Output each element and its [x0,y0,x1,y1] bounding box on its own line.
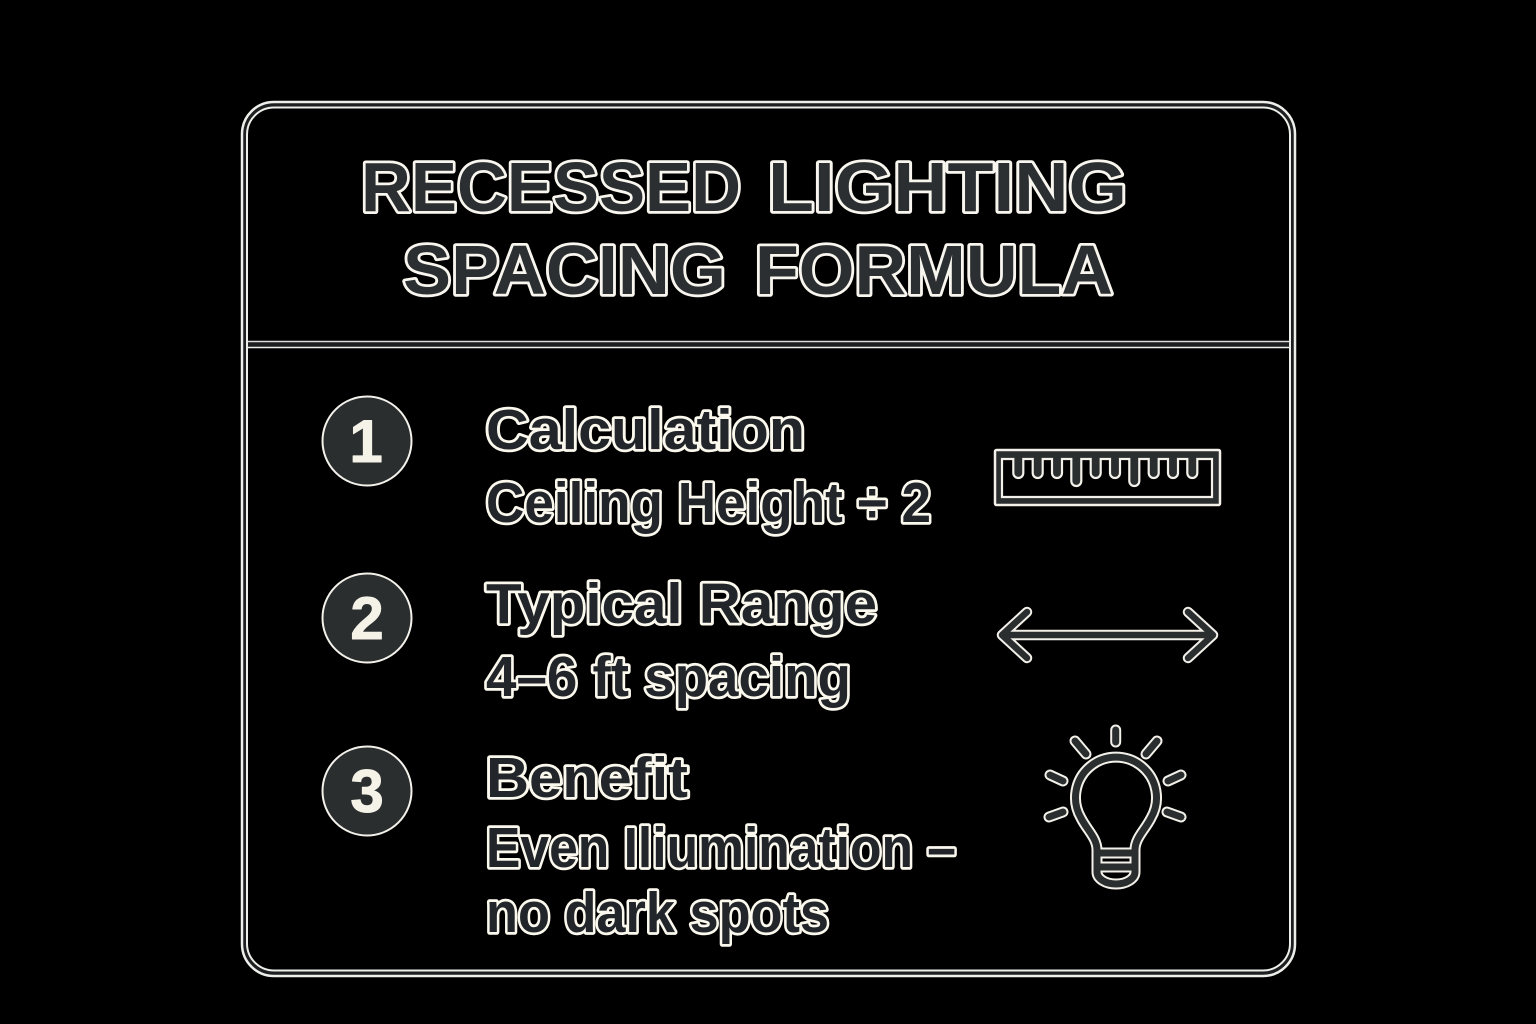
title: FORMULA [755,231,1113,309]
step 3 text: benefit: Benefit [486,746,688,810]
icon: ruler [995,450,1220,505]
icon: light bulb [1049,730,1181,884]
step 1 text: calculation [486,398,931,535]
step 3 number badge [322,746,412,836]
step 3 text: benefit: Even Iliumination – [486,816,956,880]
step 2 text: typical range: Typical Range [486,572,877,636]
step 1 text: calculation: Calculation [486,398,805,462]
step 2 number badge [322,574,412,662]
step 2 text: typical range: 4–6 ft spacing [486,645,851,709]
step 1 number badge [322,396,412,486]
title [361,148,1127,309]
icon: double arrow [1002,612,1213,658]
title: SPACING [403,231,726,309]
step 2 number badge: 2 [350,585,384,652]
step 2 text: typical range [486,572,877,709]
step 1 number badge: 1 [349,408,383,475]
panel: main frame [242,102,1295,976]
step 3 number badge: 3 [350,758,384,825]
step 3 text: benefit [486,746,956,945]
title: LIGHTING [768,148,1127,226]
step 1 text: calculation: Ceiling Height ÷ 2 [486,471,931,535]
step 3 text: benefit: no dark spots [486,881,829,945]
title: RECESSED [361,148,741,226]
